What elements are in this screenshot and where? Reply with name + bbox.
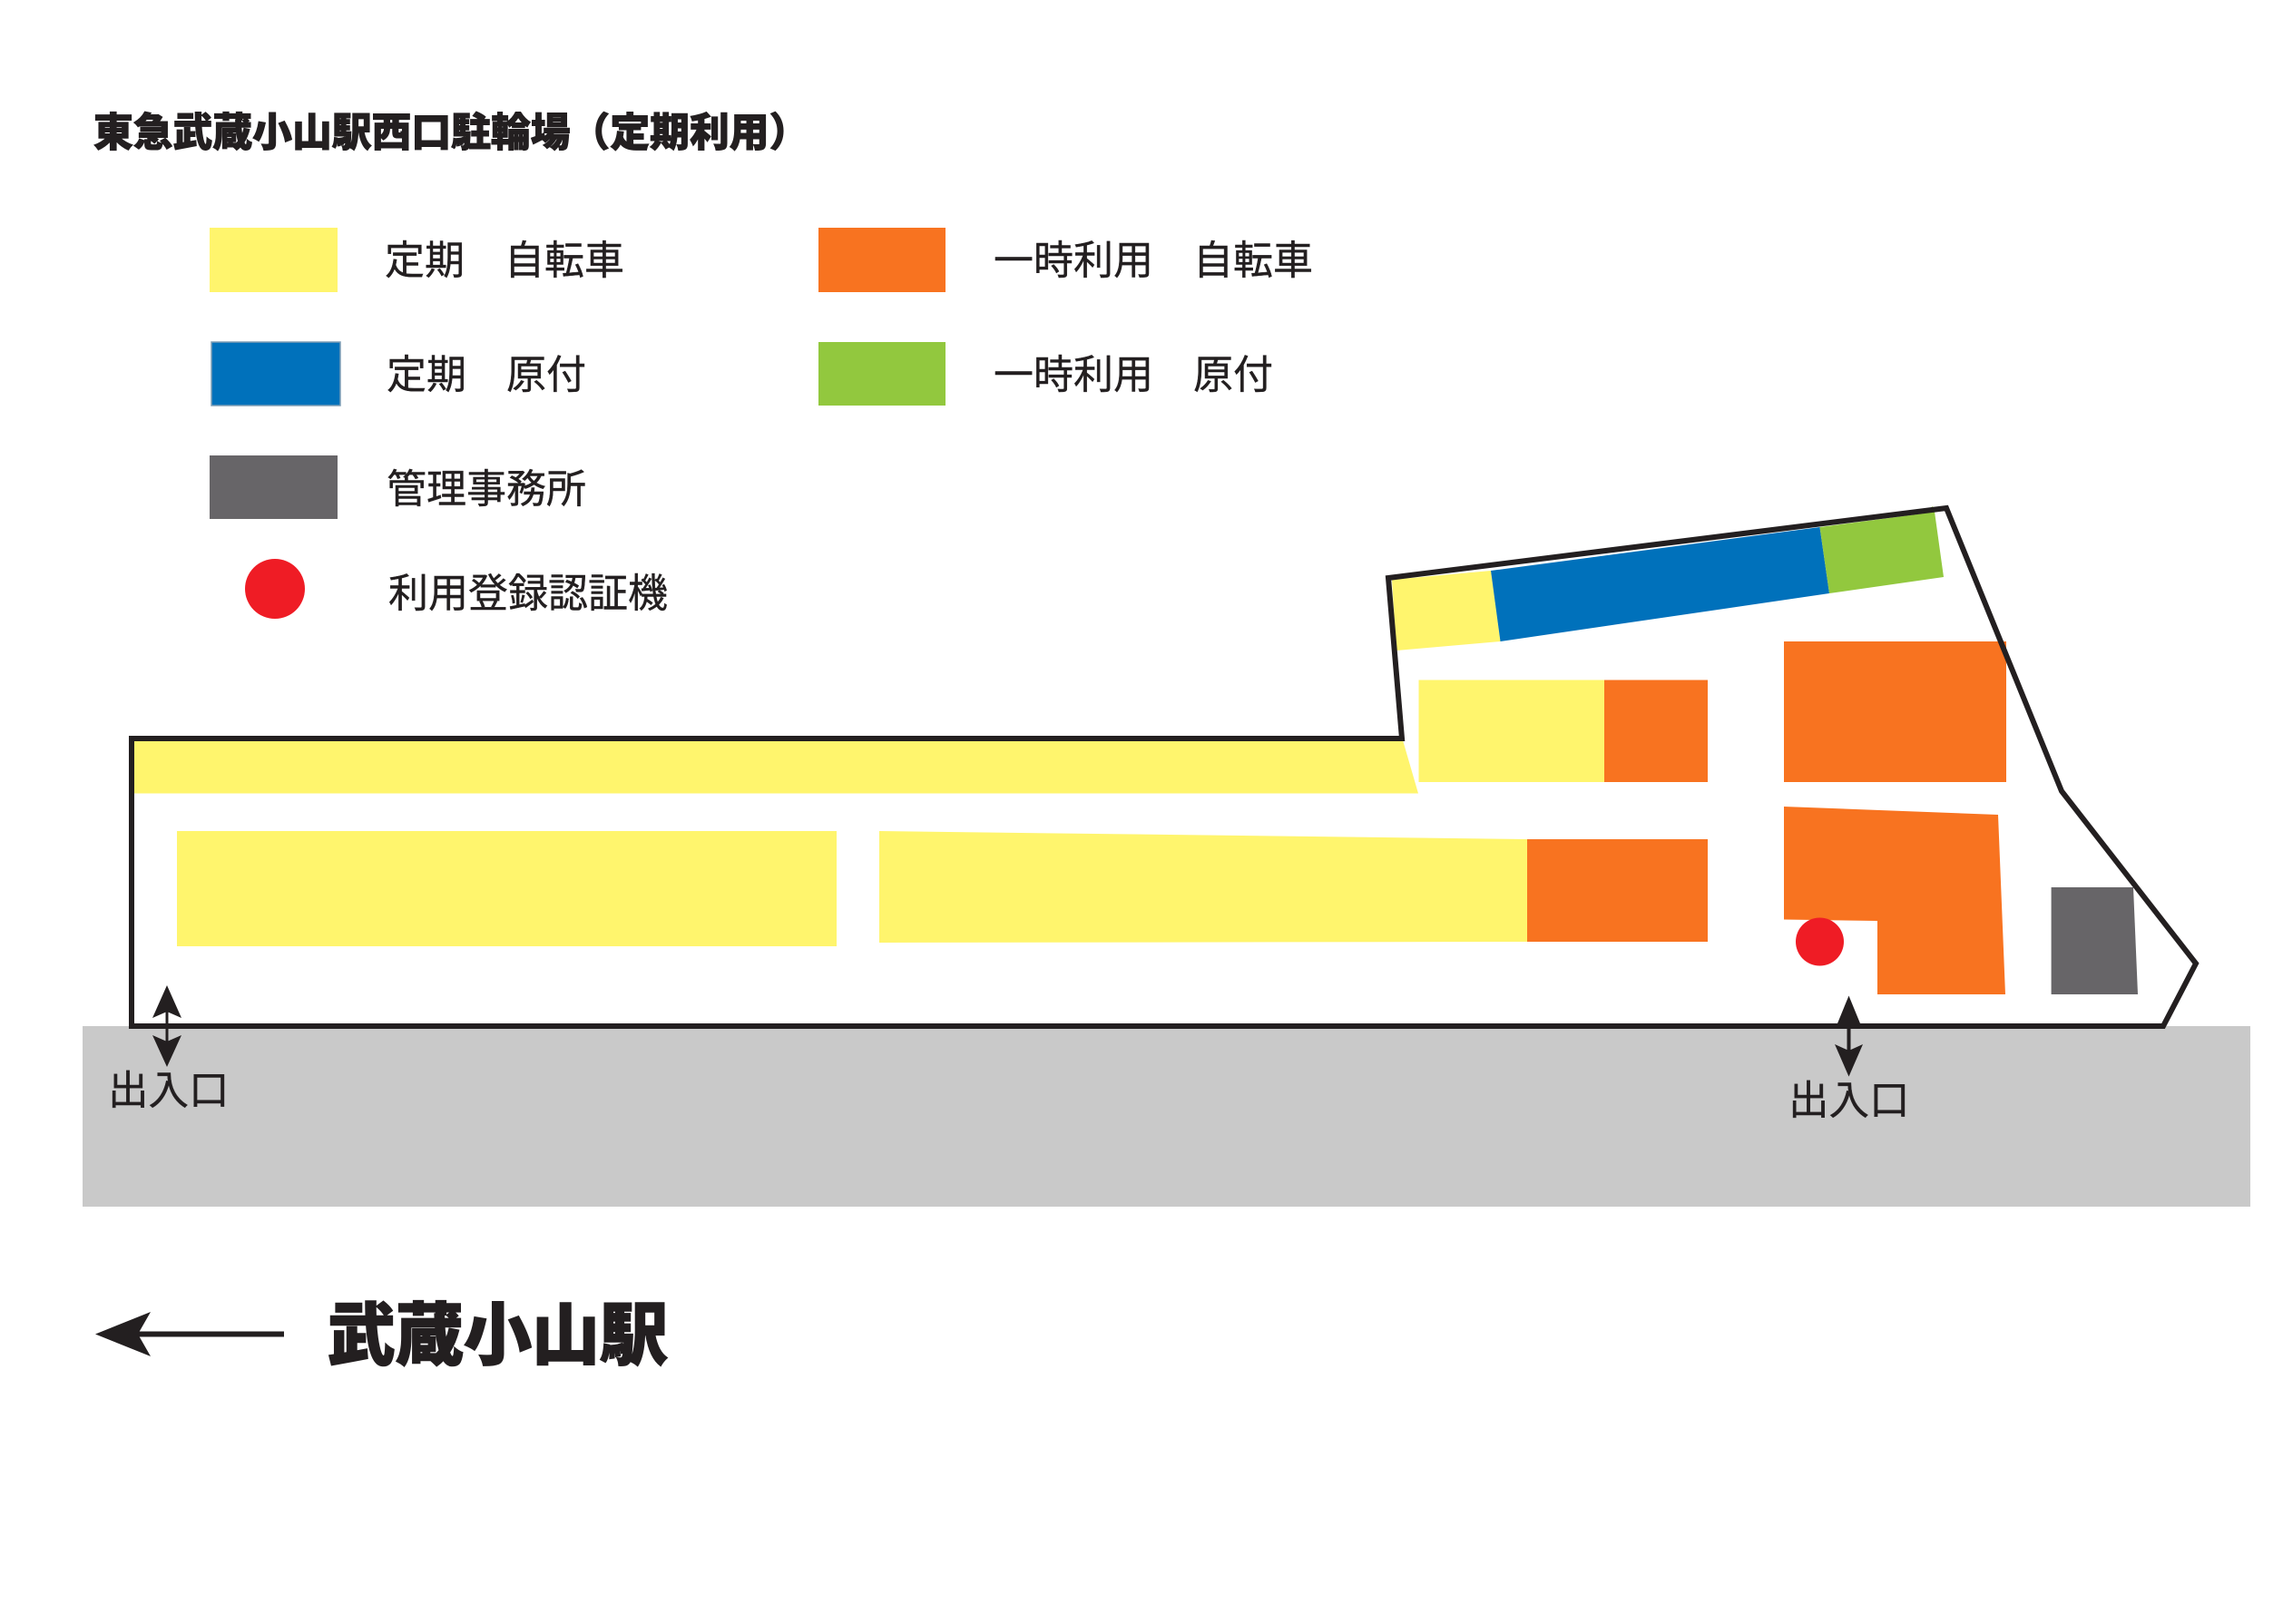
marker: registration machine: [1796, 918, 1844, 965]
area: right temporary bicycle: [1784, 641, 2006, 782]
legend: temporary moped: 一時利用 原付: [994, 353, 1273, 397]
area: upper regular bicycle: [1392, 571, 1501, 651]
legend: management office: 管理事務所: [387, 467, 586, 512]
area: middle regular bicycle: [1419, 680, 1604, 782]
arrow: towards station: [95, 1312, 284, 1356]
legend: regular moped: [211, 342, 586, 406]
arrow: right entrance: [1835, 996, 1863, 1077]
legend: regular moped: 定期 原付: [387, 353, 586, 397]
legend: temporary moped: [818, 342, 1273, 406]
arrow: left entrance: [152, 985, 181, 1067]
legend: management office: [210, 455, 586, 519]
title: 東急武蔵小山駅西口駐輪場（定期利用）: [93, 111, 808, 155]
area: lower centre temporary bicycle: [1527, 839, 1708, 942]
legend: regular bicycle: 定期 自転車: [385, 239, 624, 283]
legend: regular bicycle: [210, 228, 624, 292]
legend: registration machine: [245, 559, 668, 619]
map: parking areas: [133, 506, 2138, 994]
label: right entrance: 出入口: [1788, 1079, 1910, 1123]
legend: temporary bicycle: [818, 228, 1313, 292]
area: L-shaped temporary bicycle: [1784, 807, 2005, 994]
label: left entrance: 出入口: [108, 1069, 230, 1113]
legend: [210, 228, 1313, 619]
legend: temporary bicycle: 一時利用 自転車: [994, 239, 1313, 283]
area: management office: [2052, 887, 2138, 994]
road: [83, 1026, 2250, 1207]
area: upper regular moped: [1491, 527, 1829, 641]
area: top strip regular bicycle: [133, 740, 1418, 793]
legend: registration machine: 利用登録認証機: [388, 572, 668, 616]
label: Musashi-Koyama station: 武蔵小山駅: [328, 1297, 668, 1374]
area: lower left regular bicycle: [177, 831, 837, 946]
area: middle temporary bicycle: [1604, 680, 1708, 782]
site outline: [132, 508, 2196, 1026]
area: lower centre regular bicycle: [879, 831, 1527, 943]
area: upper temporary moped: [1820, 506, 1944, 593]
